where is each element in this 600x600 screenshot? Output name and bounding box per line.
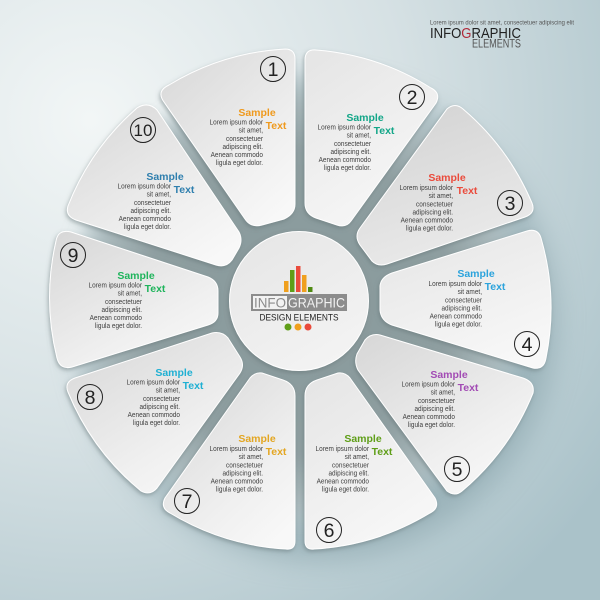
- heading: Sample: [117, 270, 155, 282]
- number 2: 2: [407, 87, 417, 109]
- body text: sit amet,: [345, 454, 369, 461]
- body text: Lorem ipsum dolor: [89, 282, 143, 290]
- heading: Sample: [238, 107, 276, 119]
- body text: [89, 282, 143, 330]
- heading: [344, 433, 393, 458]
- body text: Aenean commodo: [401, 217, 453, 225]
- body text: Aenean commodo: [119, 216, 171, 223]
- body text: sit amet,: [347, 132, 371, 140]
- body text: Aenean commodo: [319, 157, 371, 164]
- heading: [155, 367, 204, 392]
- body text: Lorem ipsum dolor: [429, 281, 483, 288]
- heading: Sample: [146, 171, 184, 183]
- number 9: 9: [68, 245, 78, 267]
- body text: adipiscing elit.: [330, 149, 371, 156]
- heading: [430, 369, 479, 394]
- body text: [318, 124, 372, 172]
- heading: [238, 107, 287, 132]
- number 4: 4: [522, 334, 533, 356]
- number 8: [78, 384, 102, 410]
- heading: Text: [457, 185, 478, 197]
- body text: consectetuer: [334, 140, 372, 148]
- body text: Lorem ipsum dolor: [127, 379, 181, 387]
- segment 8: [67, 333, 242, 493]
- body text: sit amet,: [429, 193, 453, 200]
- segment 5: [356, 335, 533, 494]
- body text: adipiscing elit.: [412, 209, 453, 217]
- heading: Text: [485, 281, 506, 293]
- number 5: 5: [452, 459, 463, 481]
- body text: adipiscing elit.: [139, 404, 180, 411]
- center circle: [230, 232, 368, 370]
- number 4: [514, 332, 540, 356]
- body text: adipiscing elit.: [101, 307, 142, 314]
- center title: GRAPHIC: [288, 294, 345, 310]
- header subtitle: ELEMENTS: [472, 38, 521, 50]
- number 8: 8: [85, 387, 95, 409]
- body text: [118, 183, 172, 231]
- heading: Sample: [155, 367, 193, 379]
- body text: Lorem ipsum dolor: [400, 185, 454, 192]
- segment 1: [161, 49, 295, 226]
- center dots: [284, 324, 312, 330]
- heading: Text: [174, 184, 195, 196]
- body text: consectetuer: [226, 462, 264, 469]
- body text: consectetuer: [332, 462, 370, 469]
- segment 2: [305, 50, 438, 226]
- heading: [117, 270, 166, 295]
- body text: ligula eget dolor.: [324, 165, 371, 172]
- body text: adipiscing elit.: [328, 470, 369, 478]
- body text: adipiscing elit.: [222, 144, 263, 151]
- segment 6: [305, 373, 437, 549]
- body text: adipiscing elit.: [130, 208, 171, 215]
- body text: Lorem ipsum dolor: [318, 124, 372, 132]
- body text: Aenean commodo: [128, 412, 180, 419]
- heading: Text: [374, 125, 395, 137]
- segment 10: [67, 105, 241, 266]
- center title: INFO: [254, 294, 286, 310]
- header title: INFOGRAPHIC: [430, 26, 521, 42]
- body text: adipiscing elit.: [414, 406, 455, 413]
- body text: Aenean commodo: [430, 313, 482, 321]
- heading: Sample: [457, 268, 495, 280]
- number 10: [130, 118, 156, 142]
- heading: Text: [183, 380, 204, 392]
- number 1: 1: [268, 59, 278, 81]
- body text: Aenean commodo: [211, 478, 263, 486]
- body text: [316, 446, 370, 494]
- header: [430, 20, 574, 50]
- body text: [210, 446, 264, 494]
- body text: [400, 185, 454, 233]
- heading: [146, 171, 195, 196]
- body text: ligula eget dolor.: [408, 422, 455, 429]
- number 7: 7: [182, 491, 192, 513]
- segment 3: [357, 106, 533, 265]
- heading: [457, 268, 506, 293]
- center bar icon: [284, 266, 312, 292]
- number 9: [60, 242, 86, 268]
- segment 7: [163, 373, 295, 549]
- heading: Text: [458, 382, 479, 394]
- body text: Lorem ipsum dolor: [210, 446, 264, 453]
- center title: [251, 294, 347, 311]
- body text: ligula eget dolor.: [406, 225, 453, 233]
- heading: Text: [266, 120, 287, 132]
- body text: sit amet,: [458, 289, 482, 296]
- heading: Text: [145, 283, 166, 295]
- number 1: [260, 56, 286, 82]
- body text: sit amet,: [239, 127, 263, 135]
- number 7: [174, 488, 200, 514]
- body text: ligula eget dolor.: [216, 160, 263, 167]
- body text: ligula eget dolor.: [133, 420, 180, 427]
- heading: Sample: [344, 433, 382, 445]
- heading: Sample: [238, 433, 276, 445]
- heading: Sample: [430, 369, 468, 381]
- body text: sit amet,: [118, 290, 142, 298]
- heading: Sample: [346, 112, 384, 124]
- center subtitle: DESIGN ELEMENTS: [260, 312, 338, 322]
- header tagline: Lorem ipsum dolor sit amet, consectetuer adipiscing elit: [430, 20, 574, 26]
- body text: sit amet,: [431, 389, 455, 397]
- number 3: [498, 190, 522, 216]
- body text: ligula eget dolor.: [322, 486, 369, 494]
- body text: ligula eget dolor.: [216, 486, 263, 494]
- body text: Lorem ipsum dolor: [210, 119, 264, 127]
- segment 4: [380, 230, 551, 368]
- body text: consectetuer: [445, 297, 483, 304]
- body text: adipiscing elit.: [441, 305, 482, 313]
- body text: ligula eget dolor.: [95, 323, 142, 330]
- number 6: [316, 518, 342, 542]
- body text: [429, 281, 483, 329]
- heading: [238, 433, 287, 458]
- body text: consectetuer: [418, 397, 456, 405]
- body text: consectetuer: [226, 135, 264, 143]
- number 6: 6: [324, 520, 334, 542]
- heading: Sample: [428, 172, 466, 184]
- body text: Lorem ipsum dolor: [118, 183, 172, 191]
- body text: Lorem ipsum dolor: [402, 381, 456, 389]
- body text: consectetuer: [143, 395, 181, 403]
- number 5: [444, 456, 470, 482]
- heading: [428, 172, 478, 197]
- segment 9: [50, 231, 218, 368]
- body text: Aenean commodo: [211, 152, 263, 159]
- body text: [127, 379, 181, 427]
- number 2: [400, 84, 424, 110]
- body text: adipiscing elit.: [222, 470, 263, 478]
- body text: [402, 381, 456, 429]
- outer soft shadow: [76, 80, 556, 560]
- heading: Text: [372, 446, 393, 458]
- wheel shadow: [64, 67, 534, 537]
- body text: Aenean commodo: [317, 478, 369, 486]
- body text: sit amet,: [147, 191, 171, 199]
- body text: [210, 119, 264, 167]
- heading: [346, 112, 395, 137]
- body text: sit amet,: [239, 454, 263, 461]
- body text: Aenean commodo: [90, 315, 142, 322]
- body text: Aenean commodo: [403, 414, 455, 421]
- body text: consectetuer: [105, 298, 143, 306]
- number 10: 10: [134, 121, 152, 140]
- heading: Text: [266, 446, 287, 458]
- body text: consectetuer: [416, 201, 454, 208]
- body text: ligula eget dolor.: [124, 224, 171, 231]
- number 3: 3: [505, 193, 515, 215]
- body text: Lorem ipsum dolor: [316, 446, 370, 453]
- body text: ligula eget dolor.: [435, 321, 482, 329]
- body text: sit amet,: [156, 387, 180, 395]
- body text: consectetuer: [134, 199, 172, 207]
